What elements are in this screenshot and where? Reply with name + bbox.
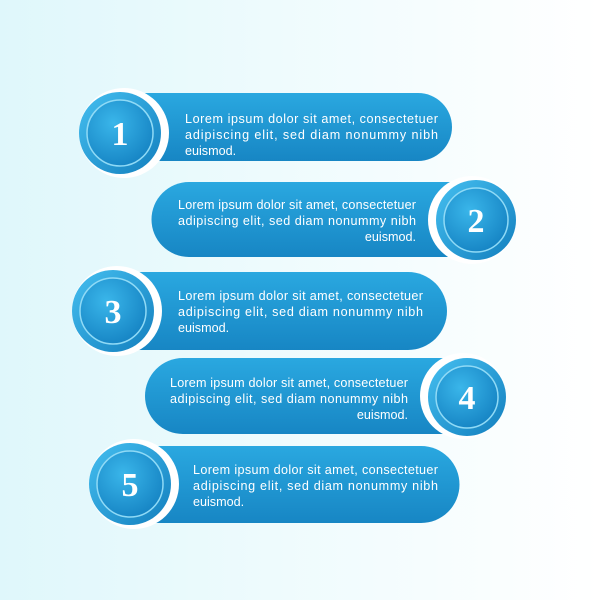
text 3: Lorem ipsum dolor sit amet, consectetuer <box>178 289 423 303</box>
bar 4 <box>145 358 467 434</box>
text 2: euismod. <box>365 230 416 244</box>
text 2: adipiscing elit, sed diam nonummy nibh <box>178 214 416 228</box>
icon: number 4 circle <box>428 358 506 436</box>
text 5 <box>193 463 438 509</box>
icon: number 5 circle <box>89 443 171 525</box>
icon: number 2 circle <box>436 180 516 260</box>
text 3: euismod. <box>178 321 229 335</box>
text 5: adipiscing elit, sed diam nonummy nibh <box>193 479 438 493</box>
text 5: Lorem ipsum dolor sit amet, consectetuer <box>193 463 438 477</box>
icon: number 2 circle: 2 <box>468 203 484 240</box>
text 2: Lorem ipsum dolor sit amet, consectetuer <box>178 198 416 212</box>
text 1: adipiscing elit, sed diam nonummy nibh <box>185 128 438 142</box>
text 4: euismod. <box>357 408 408 422</box>
icon: number 3 circle: 3 <box>104 294 122 331</box>
item 1 <box>79 88 452 178</box>
icon: number 1 circle <box>79 92 161 174</box>
bar 5 <box>130 446 460 523</box>
text 4: Lorem ipsum dolor sit amet, consectetuer <box>170 376 408 390</box>
bar 3 <box>113 272 447 350</box>
text 1: Lorem ipsum dolor sit amet, consectetuer <box>185 112 438 126</box>
text 1: euismod. <box>185 144 236 158</box>
icon: number 4 circle: 4 <box>458 380 476 417</box>
bar 1 <box>120 93 452 161</box>
item 5 <box>89 439 460 529</box>
bar 2 <box>152 182 476 257</box>
icon: number 5 circle: 5 <box>122 467 138 504</box>
item 3 <box>72 266 447 356</box>
text 2 <box>178 198 416 244</box>
icon: number 3 circle <box>72 270 154 352</box>
text 3 <box>178 289 423 335</box>
text 5: euismod. <box>193 495 244 509</box>
text 4 <box>170 376 408 422</box>
icon: number 1 circle: 1 <box>112 116 128 153</box>
text 4: adipiscing elit, sed diam nonummy nibh <box>170 392 408 406</box>
item 2 <box>152 176 516 264</box>
text 1 <box>185 112 438 158</box>
text 3: adipiscing elit, sed diam nonummy nibh <box>178 305 423 319</box>
item 4 <box>145 353 506 439</box>
